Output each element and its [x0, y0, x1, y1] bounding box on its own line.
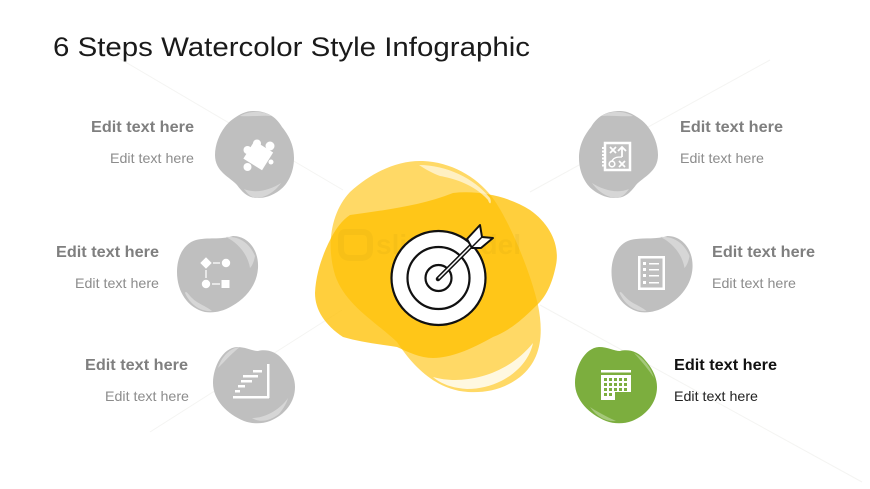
icon: target with arrow — [392, 225, 493, 325]
step 4 label: Edit text here — [680, 119, 783, 136]
step 3 label — [85, 357, 189, 404]
step 1 label: Edit text here — [110, 150, 194, 166]
step 2 label — [56, 244, 159, 291]
step 6 label (active): Edit text here — [674, 388, 758, 404]
step 6 label (active) — [674, 357, 777, 404]
step 2 label: Edit text here — [56, 244, 159, 261]
step 3 label: Edit text here — [105, 388, 189, 404]
step 5 label: Edit text here — [712, 244, 815, 261]
step 6 label (active): Edit text here — [674, 357, 777, 374]
step 2 grey blob with flowchart icon — [177, 236, 258, 312]
step 1 grey blob with puzzle icon — [215, 111, 294, 198]
step 4 grey blob with strategy icon — [579, 111, 658, 198]
icon: strategy board — [603, 143, 630, 170]
title: 6 Steps Watercolor Style Infographic — [53, 32, 530, 62]
step 3 label: Edit text here — [85, 357, 188, 374]
step 1 label — [91, 119, 194, 166]
step 6 green blob with calendar icon — [575, 347, 657, 423]
step 4 label: Edit text here — [680, 150, 764, 166]
step 4 label — [680, 119, 783, 166]
icon: calendar — [601, 370, 631, 400]
icon: checklist — [638, 256, 665, 290]
step 5 grey blob with checklist icon — [612, 236, 693, 312]
step 5 label: Edit text here — [712, 275, 796, 291]
icon: gantt chart — [233, 364, 270, 398]
central yellow watercolor blob — [315, 161, 557, 392]
step 3 grey blob with chart icon — [213, 347, 295, 423]
step 2 label: Edit text here — [75, 275, 159, 291]
watermark: slideModel — [376, 229, 521, 260]
icon: puzzle — [243, 140, 274, 171]
icon: flowchart — [201, 258, 230, 288]
step 5 label — [712, 244, 815, 291]
step 1 label: Edit text here — [91, 119, 194, 136]
